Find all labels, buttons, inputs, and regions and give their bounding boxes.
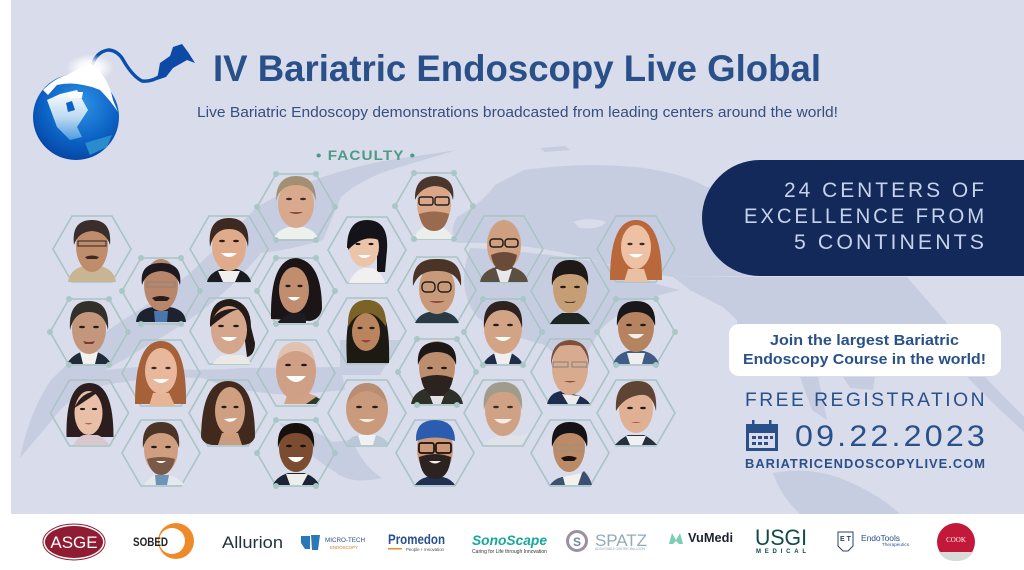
faculty 6 [395,173,473,239]
icon: globe continent [47,90,88,140]
logo: ASGE [43,524,105,560]
logo: SonoScape: Caring for Life through Innovation [472,549,547,555]
callout: 24 centers pill: 24 CENTERS OF [784,179,987,202]
faculty 19 [531,339,609,405]
faculty 16 [328,298,406,364]
faculty 28 [531,420,609,486]
logo: Allurion: Allurion [222,533,283,552]
event date: 09.22.2023 [795,420,988,453]
faculty 3 [190,216,268,282]
callout: join course: Join the largest Bariatric [770,332,959,349]
world map silhouette [20,146,1024,514]
callout: 24 centers pill: 5 CONTINENTS [794,231,987,254]
free registration: FREE REGISTRATION [745,389,987,411]
logo: EndoTools [838,532,910,551]
faculty 17 [398,339,476,405]
icon: endoscope cable [92,50,160,81]
logo: SPATZ: S [573,535,581,549]
faculty 5 [328,217,406,283]
sponsor logo strip [43,523,975,561]
logo: Promedon: Promedon [388,531,445,547]
faculty 22 [189,380,267,446]
left white margin [0,0,11,514]
faculty 2 [122,258,200,324]
logo: VuMedi [669,531,733,545]
website url: BARIATRICENDOSCOPYLIVE.COM [745,457,986,471]
faculty 25 [328,380,406,446]
logo: SonoScape [472,532,547,555]
icon: spark glow [66,54,114,82]
faculty 7 [465,216,543,282]
logo: SOBED: SOBED [133,535,168,549]
faculty 4 [257,174,335,240]
faculty hexagon grid [47,170,678,489]
faculty 27 [464,380,542,446]
icon: globe ice cap [43,63,118,112]
faculty 14 [122,340,200,406]
faculty 10 [398,257,476,323]
logo: EndoTools: E T [840,536,852,543]
logo: Micro-Tech [301,535,365,550]
logo: USGI Medical: USGI [755,525,807,550]
faculty 8 [597,216,675,282]
faculty 23 [122,420,200,486]
faculty heading: • FACULTY • [316,147,416,163]
title: IV Bariatric Endoscopy Live Global [213,47,821,89]
logo: Micro-Tech: MICRO-TECH [325,537,365,544]
logo: SPATZ [568,531,647,551]
logo: EndoTools: EndoTools [861,533,900,543]
faculty 15 [257,340,335,406]
icon: calendar [746,420,778,451]
icon: globe [33,74,119,160]
callout: 24 centers pill: EXCELLENCE FROM [744,205,987,228]
faculty 13 [50,299,128,365]
logo: Cook: COOK [946,536,966,544]
logo: VuMedi: VuMedi [688,531,733,545]
callout: join course: Endoscopy Course in the world! [743,351,986,368]
logo: EndoTools: Therapeutics [882,542,910,547]
subtitle: Live Bariatric Endoscopy demonstrations broadcasted from leading centers around the world! [197,105,838,121]
logo: USGI Medical: MEDICAL [756,549,806,555]
icon: endoscope handle [157,44,195,80]
faculty 12 [190,298,268,364]
logo: Cook [937,523,975,561]
faculty 29 [597,380,675,446]
hexagon connection nodes [47,170,678,489]
logo: Micro-Tech: ENDOSCOPY [330,545,358,550]
callout: 24 centers pill [702,160,1024,276]
faculty 26 [396,420,474,486]
faculty 9 [531,258,609,324]
callout: join course [729,324,1001,376]
faculty 18 [464,299,542,365]
logo: SPATZ: ADJUSTABLE GASTRIC BALLOON [595,547,645,551]
logo: Promedon: People + Innovation [406,547,444,552]
logo: SOBED [133,523,194,559]
logo: ASGE: ASGE [50,533,98,552]
logo: Promedon [388,531,445,552]
faculty 24 [257,420,335,486]
faculty 1 [53,216,131,282]
logo: SPATZ: SPATZ [595,531,647,550]
faculty 11 [257,258,335,324]
sea cut-out on map [573,219,606,228]
logo: SonoScape: SonoScape [472,532,547,548]
faculty 20 [597,299,675,365]
faculty 21 [50,380,128,446]
globe with endoscope logo [33,44,195,160]
